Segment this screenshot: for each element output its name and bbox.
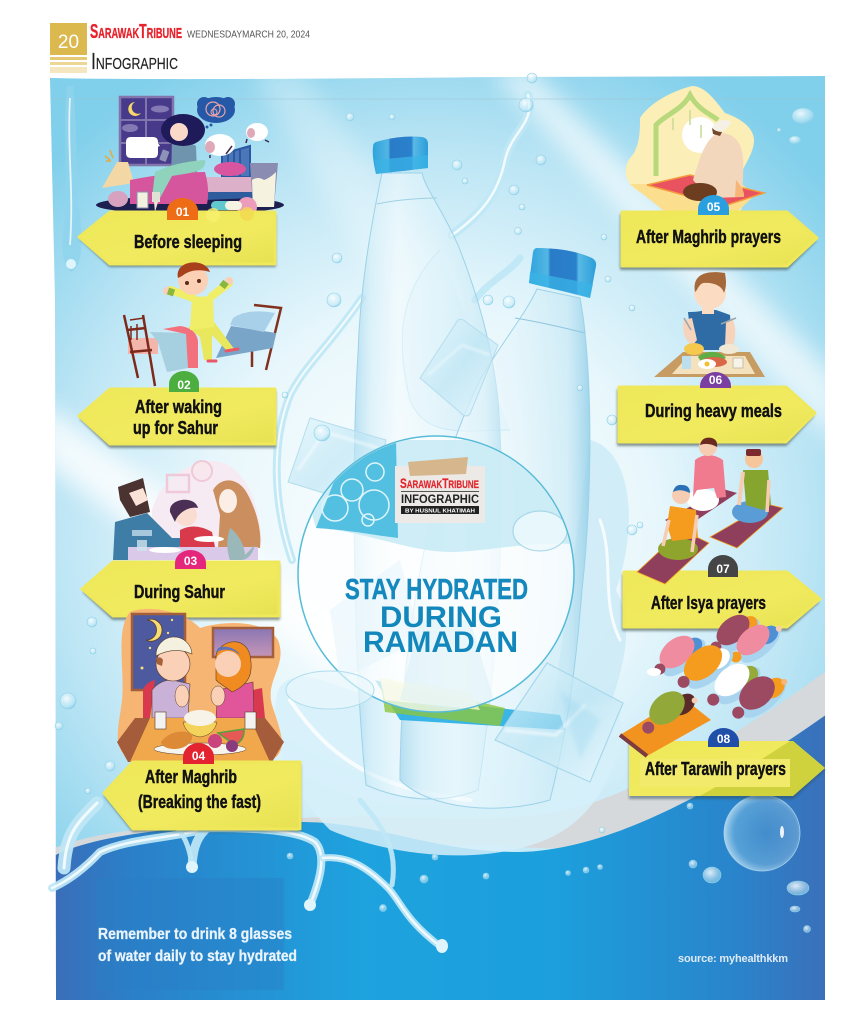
headboard — [222, 146, 250, 177]
callout 07: after isya prayers — [623, 555, 820, 630]
title: stay hydrated: STAY HYDRATED — [345, 574, 528, 606]
splash behind bottles — [275, 95, 629, 855]
badge 02: 02 — [177, 378, 191, 392]
man in pink — [687, 438, 726, 511]
reminder text: of water daily to stay hydrated — [98, 948, 297, 965]
illustration 07: three men on prayer mats — [637, 438, 783, 584]
callout 05: after maghrib prayers — [621, 195, 817, 269]
illustration 02: boy waking up — [124, 262, 281, 386]
title: ramadan: RAMADAN — [363, 626, 518, 659]
page number tab — [50, 23, 87, 73]
left window — [132, 614, 185, 690]
bottle: left — [354, 137, 501, 799]
lamp — [102, 150, 134, 207]
right window — [213, 628, 273, 657]
glasses — [155, 712, 166, 729]
callout 04: after maghrib — [104, 743, 300, 831]
reminder text — [98, 926, 297, 965]
callout 05: after maghrib prayers: After Maghrib prayers — [636, 227, 781, 247]
page number tab: 20 — [58, 32, 79, 53]
reminder text: Remember to drink 8 glasses — [98, 926, 292, 943]
callout 08: after tarawih prayers: After Tarawih prayers — [645, 759, 786, 779]
boy — [163, 262, 238, 361]
table and plates — [128, 547, 258, 560]
girl — [211, 642, 265, 718]
father — [113, 478, 184, 560]
badge 06: 06 — [709, 373, 722, 387]
title: during: DURING — [380, 601, 502, 634]
illustration 08: group prostrating — [620, 604, 794, 756]
callout 03: during sahur — [82, 550, 279, 619]
callout 02: after waking: up for Sahur — [133, 418, 218, 438]
table — [117, 718, 284, 762]
sheep — [205, 123, 269, 158]
callout 03: during sahur: During Sahur — [134, 582, 225, 602]
bottle label band — [375, 678, 565, 730]
worshipper 3 — [646, 624, 711, 686]
worshipper 6 — [723, 662, 794, 730]
arch — [656, 95, 718, 176]
badge 07 — [708, 555, 738, 577]
mother — [213, 480, 260, 548]
thought cloud — [197, 97, 235, 128]
callout 06: during heavy meals: During heavy meals — [645, 401, 782, 421]
illustration 03: family at sahur — [113, 461, 262, 560]
grey wave band — [50, 668, 830, 860]
bubble droplet: left of circle — [286, 671, 374, 709]
logo card: INFOGRAPHIC — [401, 494, 479, 506]
ice cube: left — [288, 418, 386, 508]
woman — [152, 114, 205, 212]
badge 08: 08 — [717, 732, 730, 746]
man — [683, 120, 744, 201]
callout 04: after maghrib: After Maghrib — [145, 767, 237, 787]
worshipper 4 — [669, 633, 739, 700]
callout 02: after waking — [79, 371, 275, 447]
speech bubble — [126, 137, 160, 158]
ice cube: upper — [420, 319, 498, 416]
man in orange — [658, 485, 698, 560]
badge 05: 05 — [707, 200, 720, 214]
man in green — [732, 449, 771, 523]
badge 08 — [708, 728, 739, 747]
bottle: right — [400, 248, 596, 808]
meal — [682, 343, 743, 369]
child — [170, 500, 215, 547]
window — [120, 97, 173, 165]
source credit: source: myhealthkkm — [678, 953, 788, 965]
masthead: newspaper name: SARAWAKTRIBUNE — [90, 21, 182, 43]
icon: left water streak — [63, 86, 81, 272]
badge 01 — [167, 198, 198, 220]
rug — [647, 175, 764, 206]
worshipper 2 — [723, 612, 788, 674]
badge 06 — [700, 372, 731, 388]
illustration 01: sleepless woman — [96, 97, 284, 217]
logo card: BY HUSNUL KHATIMAH — [405, 508, 475, 514]
worshipper 1 — [703, 604, 765, 664]
logo card: SARAWAKTRIBUNE — [400, 475, 479, 491]
splash drips over the sea — [52, 800, 448, 953]
callout 07: after isya prayers: After Isya prayers — [651, 593, 766, 613]
badge 07: 07 — [716, 562, 730, 576]
illustration 04: family breaking fast — [117, 609, 284, 765]
worshipper 7 — [633, 679, 700, 742]
callout 02: after waking: After waking — [135, 397, 222, 417]
large bubble — [724, 795, 800, 871]
badge 04: 04 — [192, 749, 205, 763]
badge 04 — [183, 743, 214, 764]
illustration 05: man praying after maghrib — [626, 86, 764, 214]
ice cube: lower right — [495, 663, 623, 782]
badge 01: 01 — [176, 205, 189, 219]
callout 01: before sleeping — [79, 198, 275, 266]
bed frame right — [252, 305, 281, 370]
logo card — [395, 457, 485, 523]
milk glass — [137, 163, 278, 208]
blue sea — [50, 712, 830, 1005]
badge 05 — [698, 195, 729, 215]
food — [154, 743, 246, 755]
badge 02 — [169, 371, 199, 392]
masthead: date: WEDNESDAYMARCH 20, 2024 — [187, 28, 310, 40]
darker text patch — [238, 878, 284, 990]
pills — [211, 197, 257, 217]
callout 01: before sleeping: Before sleeping — [134, 232, 242, 252]
bed — [130, 162, 253, 204]
illustration 06: man eating — [654, 272, 765, 377]
worshipper 5 — [698, 652, 766, 717]
callout 08: after tarawih prayers — [629, 728, 825, 799]
callout 06: during heavy meals — [618, 372, 815, 445]
blanket — [150, 332, 188, 372]
section label: INFOGRAPHIC — [91, 48, 178, 74]
badge 03: 03 — [184, 554, 197, 568]
callout 04: after maghrib: (Breaking the fast) — [138, 792, 261, 812]
badge 03 — [175, 550, 206, 569]
water droplets — [55, 73, 814, 932]
central circle — [290, 436, 590, 720]
boy — [143, 637, 192, 718]
